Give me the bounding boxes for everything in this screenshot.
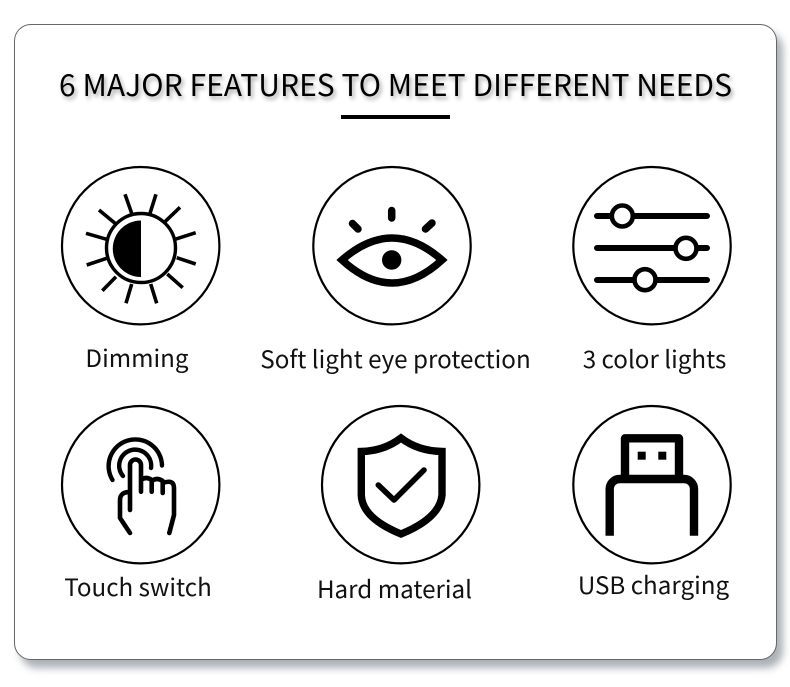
icon: shield with check	[361, 438, 442, 534]
title underline	[341, 115, 450, 119]
label: hard material: Hard material	[317, 570, 472, 605]
label: 3 color lights: 3 color lights	[583, 340, 726, 375]
icon: eye	[342, 210, 442, 283]
label: touch switch: Touch switch	[64, 568, 212, 603]
feature: soft light eye protection	[260, 167, 531, 375]
label: dimming: Dimming	[85, 339, 189, 374]
feature: touch switch	[62, 406, 219, 603]
icon: half sun	[86, 194, 196, 303]
feature: dimming	[62, 167, 219, 374]
feature: 3 color lights	[573, 167, 731, 375]
icon: usb plug	[610, 438, 694, 536]
icon: touching hand	[109, 439, 174, 533]
feature: hard material	[317, 406, 479, 605]
label: usb charging: USB charging	[578, 566, 730, 601]
label: soft light eye protection: Soft light eye protection	[260, 340, 531, 375]
title: 6 MAJOR FEATURES TO MEET DIFFERENT NEEDS	[59, 61, 732, 105]
feature: usb charging	[573, 406, 731, 601]
icon: sliders	[597, 206, 707, 290]
